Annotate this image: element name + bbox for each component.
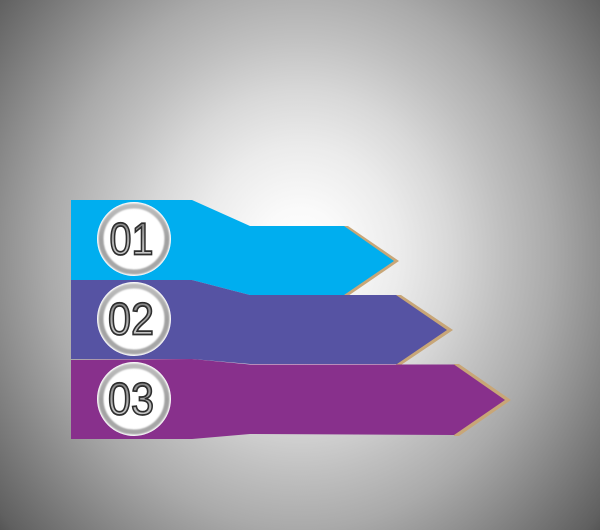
arrow 01: blue	[71, 200, 399, 296]
arrow 03: purple	[71, 359, 511, 439]
number 02: 02	[108, 295, 154, 345]
badge 03	[97, 362, 171, 436]
arrow 02: indigo	[71, 280, 453, 365]
badge 01	[97, 202, 171, 276]
number 03: 03	[108, 375, 154, 425]
number 01: 01	[109, 214, 154, 264]
badge 02	[97, 282, 171, 356]
